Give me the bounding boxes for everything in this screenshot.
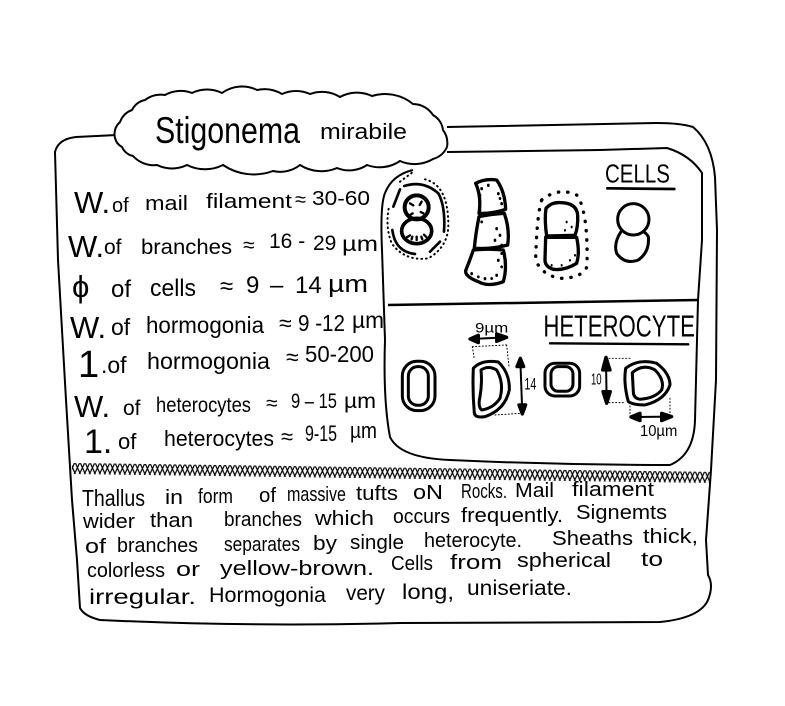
panel: cells and heterocyte (381, 148, 702, 465)
title cloud (115, 87, 447, 174)
line: width of heterocytes: µm (344, 390, 376, 413)
description line 4: or (176, 559, 200, 581)
line: width of branches: branches (141, 236, 232, 259)
line: length of hormogonia: .of (101, 352, 127, 378)
description line 2: wider (82, 511, 135, 533)
line: diameter of cells: ϕ (72, 269, 89, 304)
line: width of branches: ≈ (243, 234, 255, 257)
description line 3: single (350, 532, 404, 554)
line: length of heterocytes: µm (350, 418, 377, 443)
description line 1: filament (572, 479, 655, 501)
description line 5: uniseriate. (467, 577, 572, 600)
line: diameter of cells: of (111, 276, 131, 303)
divider (388, 300, 698, 305)
heading: heterocyte: HETEROCYTE (543, 310, 695, 344)
line: width of heterocytes: ≈ (266, 392, 278, 415)
line: length of hormogonia: 50-200 (305, 341, 374, 367)
description line 2: which (314, 508, 374, 530)
line: width of branches: µm (342, 233, 378, 256)
description line 2: frequently. (461, 505, 563, 527)
cell drawing: sheathed pair (387, 172, 448, 259)
cell drawing: pair in dotted sheath (536, 192, 587, 278)
description line 3: thick, (643, 526, 698, 548)
line: width of heterocytes: heterocytes (156, 394, 251, 417)
description line 4: spherical (517, 550, 611, 572)
description line 3: of (85, 536, 107, 558)
line: length of heterocytes: 9-15 (305, 421, 337, 446)
line: width of main filament: of (112, 195, 129, 217)
line: width of main filament: ≈ (295, 189, 306, 211)
line: length of hormogonia: 1 (78, 344, 99, 386)
description line 2: occurs (393, 506, 450, 528)
description line 5: irregular. (89, 586, 196, 609)
line: width of main filament: filament (206, 191, 293, 213)
line: length of heterocytes: ≈ (281, 424, 293, 449)
description line 4: from (450, 552, 502, 574)
description line 1: massive (287, 484, 346, 506)
heterocyte drawing: D shape with dimensions: 9µm (475, 320, 508, 336)
line: width of heterocytes: 9 – 15 (291, 390, 337, 413)
line: diameter of cells: – (270, 272, 284, 299)
line: length of heterocytes: 1. (84, 423, 112, 461)
description line 3: branches (117, 535, 198, 557)
line: length of heterocytes: of (118, 429, 137, 454)
line: width of hormogonia: 9 -12 (298, 310, 345, 336)
line: length of hormogonia: hormogonia (147, 348, 270, 374)
description line 3: heterocyte. (424, 530, 522, 552)
line: diameter of cells: ≈ (220, 273, 233, 300)
description line 1: in (165, 487, 183, 509)
description line 1: Rocks. (461, 481, 507, 503)
description line 4: Cells (391, 553, 433, 575)
description line 1: tufts (356, 483, 398, 505)
line: width of hormogonia: of (111, 314, 131, 340)
description line 1: of (259, 485, 276, 507)
description line 3: Sheaths (552, 528, 633, 550)
line: diameter of cells: 14 (295, 272, 322, 299)
line: width of branches: 29 (313, 232, 336, 255)
description line 1: form (198, 486, 233, 508)
description line 4: colorless (87, 560, 165, 582)
hatched divider (72, 463, 710, 483)
drawings in zoomed coordinates (387, 159, 695, 440)
heterocyte drawing: wide D shape with dimensions: 10 (591, 371, 602, 388)
description text (82, 479, 698, 609)
line: diameter of cells: cells (150, 275, 196, 302)
title text: mirabile (320, 119, 407, 144)
heading: cells: CELLS (605, 159, 670, 189)
outer frame (55, 123, 717, 624)
cell drawing: plain pair (616, 204, 649, 261)
line: width of main filament: W. (74, 185, 110, 220)
heterocyte drawing: wide D shape with dimensions (591, 357, 677, 440)
heterocyte drawing: oval (402, 361, 435, 411)
line: width of heterocytes: W. (74, 389, 110, 424)
description line 4: to (641, 549, 663, 571)
heterocyte drawing: wide D shape with dimensions: 10µm (640, 423, 677, 440)
line: width of branches: 16 - (269, 230, 305, 253)
line: width of main filament: mail (145, 193, 188, 215)
line: width of branches: of (104, 236, 122, 259)
description line 4: yellow-brown. (220, 558, 374, 580)
description line 2: Signemts (576, 502, 667, 524)
description line 3: by (313, 533, 337, 555)
heterocyte drawing: D shape with dimensions (470, 320, 536, 417)
line: width of main filament: 30-60 (312, 188, 370, 210)
description line 2: than (150, 510, 193, 532)
line: width of hormogonia: µm (352, 307, 384, 333)
line: width of branches: W. (68, 229, 104, 264)
description line 3: separates (224, 534, 300, 556)
description line 5: long, (402, 581, 454, 604)
cell drawing: three-cell chain (466, 180, 508, 284)
description line 1: Mail (515, 480, 554, 502)
description line 1: oN (413, 482, 443, 504)
description line 2: branches (224, 509, 302, 531)
title text: Stigonema (155, 110, 300, 151)
measurements list (68, 185, 384, 461)
heterocyte drawing: D shape with dimensions: 14 (524, 374, 536, 393)
line: width of heterocytes: of (123, 397, 141, 420)
line: width of hormogonia: ≈ (279, 310, 292, 336)
line: diameter of cells: µm (328, 271, 368, 298)
line: width of hormogonia: hormogonia (146, 312, 264, 338)
description line 1: Thallus (82, 485, 145, 511)
description line 5: Hormogonia (209, 584, 326, 607)
description line 5: very (346, 582, 385, 605)
line: diameter of cells: 9 (246, 272, 259, 299)
line: length of heterocytes: heterocytes (164, 426, 274, 451)
line: width of hormogonia: W. (70, 310, 106, 345)
heterocyte drawing: rounded square (545, 363, 580, 396)
line: length of hormogonia: ≈ (286, 344, 299, 370)
